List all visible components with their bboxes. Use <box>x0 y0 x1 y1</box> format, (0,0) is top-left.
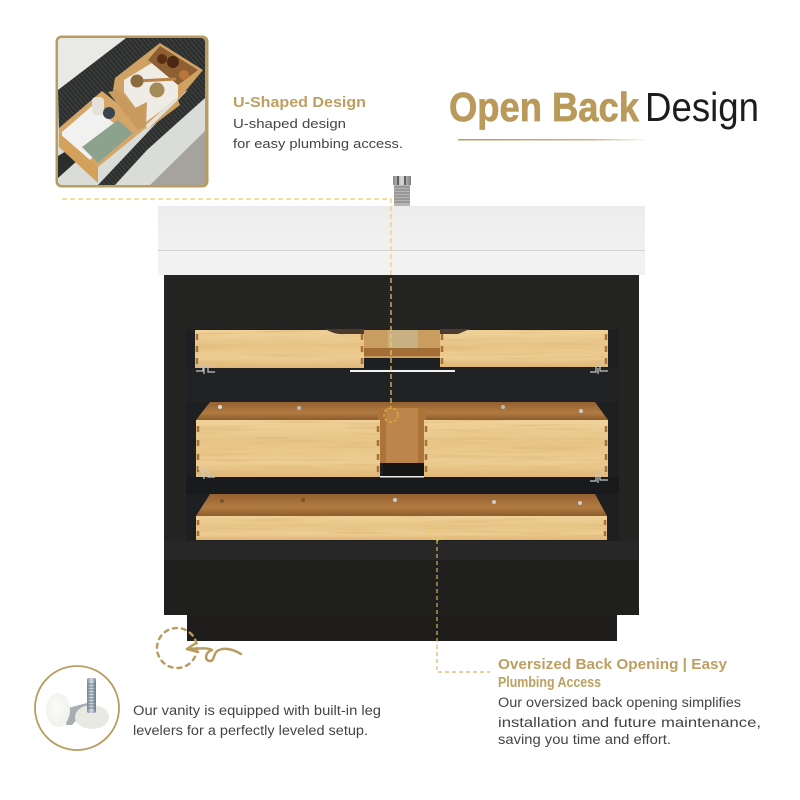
text: U-shaped description line 2: for easy plumbing access. <box>233 136 403 151</box>
photo: upper wood tray <box>113 43 203 130</box>
photo: fluted drawer fronts <box>58 38 205 130</box>
heading: Oversized Back Opening: Plumbing Access <box>498 674 601 691</box>
text: back opening description: installation and future maintenance, <box>498 715 761 730</box>
top drawer <box>195 329 608 372</box>
photo: floor tile <box>150 131 205 185</box>
callout leader: U-shaped design <box>62 199 391 407</box>
leveler upright bolt <box>87 678 96 713</box>
middle drawer <box>196 402 608 478</box>
vanity cabinet <box>164 275 639 641</box>
heading: Oversized Back Opening <box>498 656 728 691</box>
callout leader: back opening <box>437 540 490 672</box>
photo: countertop <box>58 38 126 90</box>
callout marker: back opening <box>430 526 444 540</box>
leveler stem shadow <box>66 703 87 725</box>
text: leveler description: levelers for a perfectly leveled setup. <box>133 723 368 738</box>
heading: Oversized Back Opening: Oversized Back Opening | Easy <box>498 656 728 673</box>
photo: lower wood tray <box>59 91 147 167</box>
heading: U-Shaped Design: U-Shaped Design <box>233 95 366 111</box>
bottom drawer <box>196 494 607 540</box>
callout marker: U-shaped cutout <box>384 408 398 422</box>
title: Open Back Design: Design <box>645 84 759 130</box>
drawer slide hardware <box>196 361 608 483</box>
title: Open Back Design <box>449 84 759 130</box>
title: Open Back Design: Open Back <box>449 84 639 130</box>
countertop <box>158 206 645 275</box>
text: back opening description: saving you time and effort. <box>498 732 671 747</box>
leveler base <box>75 705 109 729</box>
text: leveler description: Our vanity is equipped with built-in leg <box>133 703 381 718</box>
icon: drain pipe <box>393 176 411 206</box>
text: back opening description: Our oversized back opening simplifies <box>498 695 741 710</box>
icon: leg leveler <box>35 666 119 750</box>
inset photo: drawer interior <box>56 36 208 188</box>
text: leveler description <box>133 703 381 738</box>
text: back opening description <box>498 695 761 747</box>
icon: dashed circle and curled arrow <box>157 628 241 668</box>
leveler white cap <box>46 693 70 727</box>
text: U-shaped description: U-shaped design <box>233 116 346 131</box>
